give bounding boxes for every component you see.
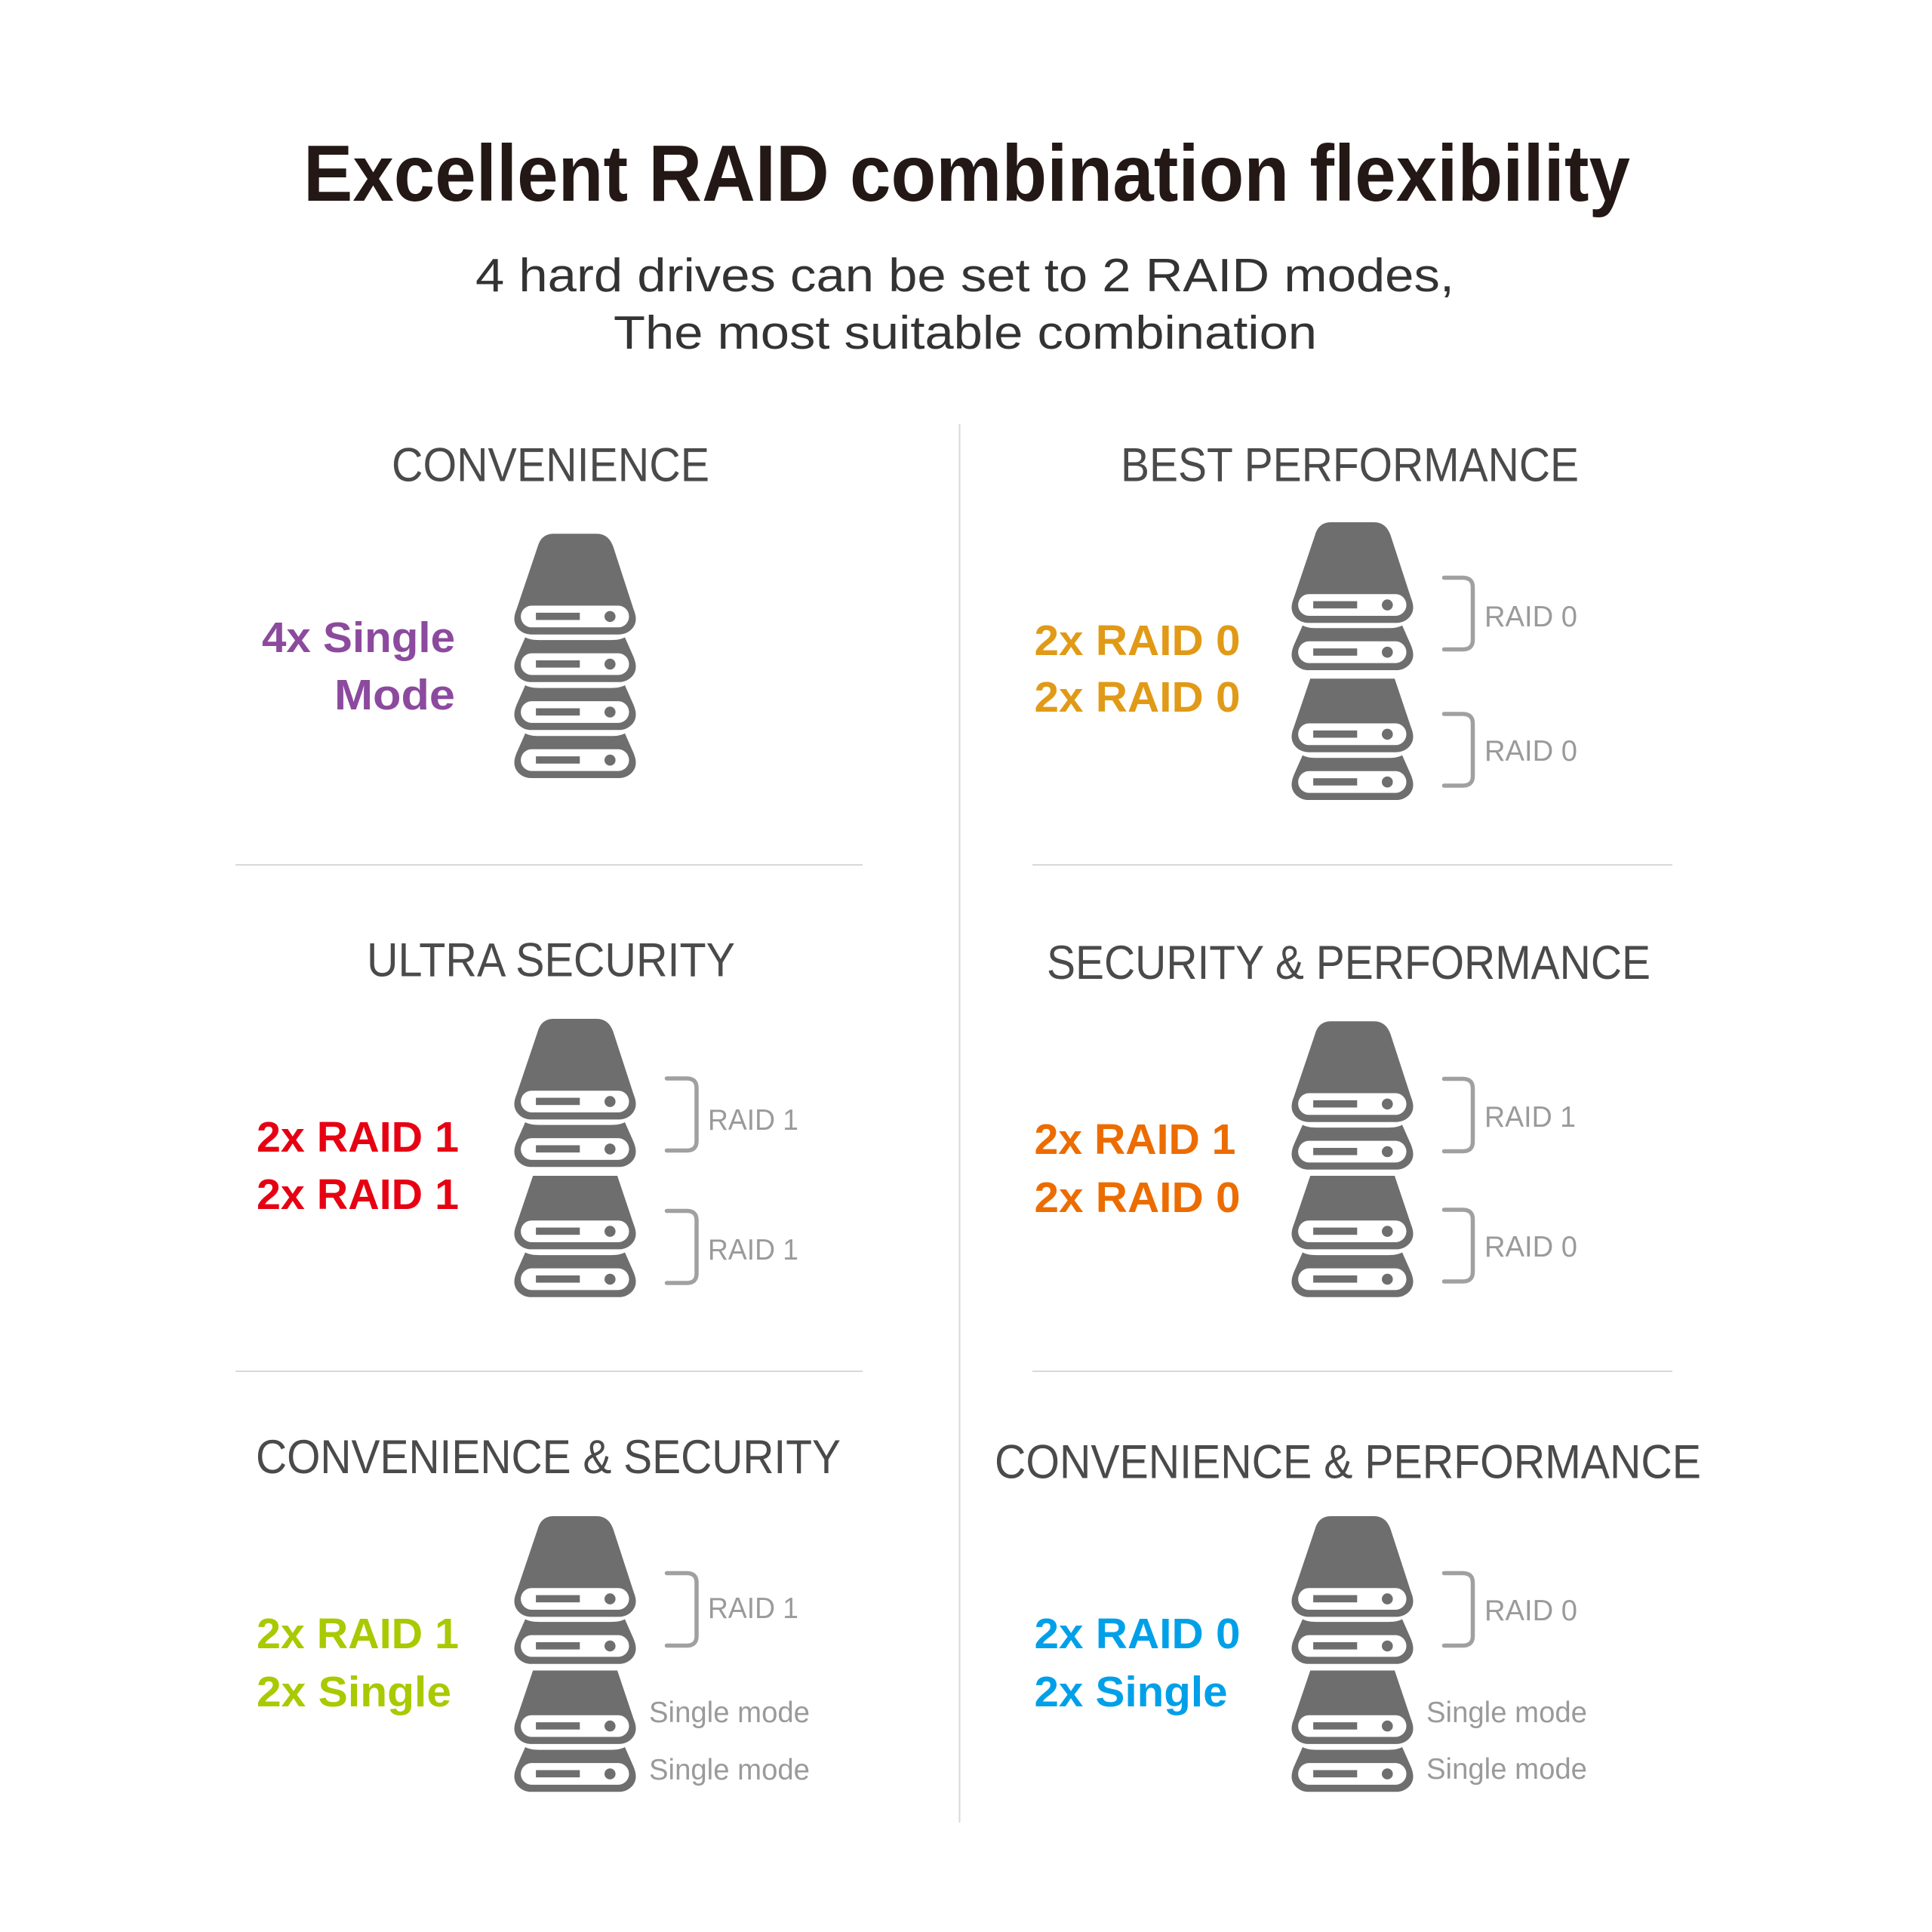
bracket and RAID label: [1444, 578, 1577, 649]
subtitle: 4 hard drives can be set to 2 RAID modes,: [475, 250, 1454, 302]
horizontal divider: [235, 864, 863, 866]
mode label: 2x Single: [1034, 1668, 1227, 1716]
bracket and RAID label: [667, 1078, 798, 1150]
mode label: [257, 1113, 459, 1219]
bracket and RAID label: [667, 1573, 798, 1645]
heading: BEST PERFORMANCE: [1121, 439, 1579, 492]
mode label: 2x RAID 0: [1034, 1610, 1241, 1658]
mode label: [1034, 1115, 1241, 1222]
single mode label: Single mode: [649, 1697, 810, 1729]
mode label: [257, 1610, 459, 1716]
bracket and RAID label: [1444, 1573, 1577, 1645]
bracket and RAID label: [1444, 1079, 1576, 1152]
horizontal divider: [1032, 1371, 1672, 1372]
icon: drive stack: [515, 1516, 635, 1792]
mode label: 4x Single: [262, 614, 455, 662]
mode label: 2x RAID 1: [1034, 1115, 1236, 1164]
bracket and RAID label: [1444, 714, 1577, 786]
mode label: 2x Single: [257, 1668, 451, 1716]
mode label: 2x RAID 0: [1034, 617, 1241, 665]
single mode label: Single mode: [1426, 1753, 1587, 1786]
mode label: [1034, 1610, 1241, 1716]
panel: convenience and security: [256, 1431, 841, 1792]
mode label: 2x RAID 0: [1034, 673, 1241, 721]
vertical divider: [958, 424, 960, 1823]
icon: drive stack: [1292, 1021, 1413, 1297]
icon: drive stack: [1292, 522, 1413, 800]
heading: ULTRA SECURITY: [367, 934, 735, 987]
panel: ultra security: [257, 934, 798, 1297]
subtitle: [475, 250, 1454, 359]
bracket and RAID label: [1444, 1210, 1577, 1281]
bracket and RAID label: RAID 0: [1484, 1595, 1577, 1627]
bracket and RAID label: RAID 0: [1484, 601, 1577, 633]
bracket and RAID label: RAID 0: [1484, 1231, 1577, 1263]
panel: security and performance: [1034, 937, 1651, 1297]
panel: best performance: [1034, 439, 1579, 800]
mode label: [1034, 617, 1241, 721]
single mode label: Single mode: [649, 1754, 810, 1786]
heading: CONVENIENCE & PERFORMANCE: [995, 1435, 1701, 1488]
panel: convenience: [262, 439, 709, 778]
icon: drive stack: [515, 534, 635, 778]
horizontal divider: [1032, 864, 1672, 866]
subtitle: The most suitable combination: [614, 307, 1317, 359]
heading: CONVENIENCE & SECURITY: [256, 1431, 841, 1484]
mode label: 2x RAID 0: [1034, 1174, 1241, 1222]
mode label: 2x RAID 1: [257, 1113, 459, 1161]
horizontal divider: [235, 1371, 863, 1372]
icon: drive stack: [515, 1019, 635, 1297]
mode label: [262, 614, 455, 719]
single mode label: Single mode: [1426, 1697, 1587, 1729]
bracket and RAID label: RAID 1: [708, 1592, 798, 1625]
mode label: 2x RAID 1: [257, 1171, 459, 1219]
bracket and RAID label: RAID 1: [708, 1234, 798, 1266]
panel: convenience and performance: [995, 1435, 1701, 1792]
title: Excellent RAID combination flexibility: [303, 129, 1630, 218]
bracket and RAID label: RAID 0: [1484, 735, 1577, 768]
heading: CONVENIENCE: [392, 439, 709, 492]
mode label: 2x RAID 1: [257, 1610, 459, 1658]
heading: SECURITY & PERFORMANCE: [1047, 937, 1651, 989]
bracket and RAID label: RAID 1: [1484, 1101, 1576, 1134]
icon: drive stack: [1292, 1516, 1413, 1792]
bracket and RAID label: [667, 1211, 798, 1283]
bracket and RAID label: RAID 1: [708, 1104, 798, 1137]
mode label: Mode: [334, 671, 455, 719]
